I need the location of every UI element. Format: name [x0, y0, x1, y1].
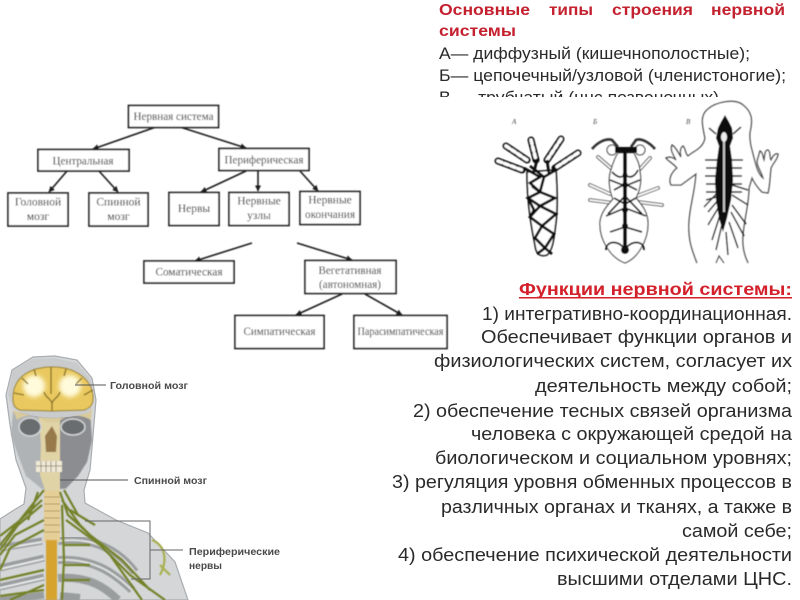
outline	[600, 153, 648, 263]
box: autonomic: (автономная)	[319, 279, 381, 291]
box: nervous system	[128, 106, 218, 128]
body silhouette: head, neck and shoulders	[0, 356, 188, 600]
text: type A: А— диффузный (кишечнополостные);	[439, 44, 750, 63]
diagram: three types of nervous systems	[498, 101, 778, 263]
skull	[11, 408, 92, 490]
heading: functions: Функции нервной системы:	[519, 279, 792, 299]
heading: types of nervous system structure: строения	[612, 2, 693, 19]
function 1 text: физиологических систем, согласует их	[434, 350, 793, 371]
function 3 text: самой себе;	[682, 520, 792, 541]
box: autonomic	[305, 260, 396, 294]
leader frame: peripheral nerves	[85, 521, 183, 579]
box: nerve endings	[300, 192, 360, 224]
function 1 text: деятельность между собой;	[535, 375, 792, 396]
heading: types of nervous system structure: системы	[439, 23, 516, 40]
skull cap	[8, 358, 94, 418]
brain	[13, 367, 93, 411]
box: peripheral	[219, 148, 309, 170]
box: autonomic: Вегетативная	[318, 265, 382, 277]
nerve cord	[623, 152, 627, 252]
box: spinal cord	[89, 193, 148, 226]
diagram A: hydra diffuse nervous system	[498, 118, 578, 256]
text: type B: Б— цепочечный/узловой (членистоногие);	[439, 66, 786, 85]
heading: types of nervous system structure: нервной	[711, 2, 785, 19]
box: nerve endings: Нервные	[308, 194, 352, 206]
box: nervous system: Нервная система	[134, 111, 214, 123]
function 3 text	[392, 471, 792, 541]
label: spinal cord: Спинной мозг	[134, 475, 208, 487]
box: nerves	[169, 192, 219, 226]
outline	[666, 101, 778, 263]
box: nerve ganglia: Нервные	[237, 196, 281, 208]
label: peripheral nerves: Периферические	[189, 546, 280, 558]
heading: types of nervous system structure: Основные	[439, 2, 530, 19]
diagram C: vertebrate tubular nervous system: В	[686, 118, 691, 126]
panel: nervous system structure types text	[439, 3, 784, 97]
function 4 text: 4) обеспечение психической деятельности	[398, 544, 792, 565]
function 3 text: 3) регуляция уровня обменных процессов в	[392, 471, 792, 492]
label: peripheral nerves: нервы	[189, 560, 222, 572]
function 3 text: различных органах и тканях, а также в	[441, 496, 792, 517]
box: brain: Головной	[15, 196, 61, 208]
function 2 text: биологическом и социальном уровнях;	[435, 447, 792, 468]
function 2 text: 2) обеспечение тесных связей организма	[413, 400, 793, 421]
box: spinal cord: Спинной	[96, 196, 141, 208]
box: brain	[8, 193, 68, 226]
heading: types of nervous system structure: типы	[549, 2, 593, 19]
panel: functions of the nervous system	[392, 279, 793, 589]
box: nerve ganglia: узлы	[247, 210, 271, 222]
box: spinal cord: мозг	[107, 211, 130, 223]
leader line: spinal cord	[60, 480, 128, 481]
label: peripheral nerves	[190, 548, 280, 571]
leader line: brain	[75, 384, 106, 386]
function 1 text: Обеспечивает функции органов и	[481, 326, 792, 347]
text: type C, clipped: В — трубчатый (цнс позвоночных)	[439, 88, 719, 107]
box: parasympathetic	[354, 316, 447, 348]
box: peripheral: Периферическая	[224, 154, 304, 166]
arrows between flowchart boxes	[49, 127, 402, 315]
legs and antennae	[590, 157, 662, 205]
heading: types of nervous system structure	[440, 3, 784, 36]
ribs	[0, 540, 135, 600]
box: somatic: Соматическая	[156, 266, 223, 278]
box: nerve ganglia	[229, 192, 289, 226]
box: nerve endings: окончания	[305, 209, 356, 221]
nerves	[704, 127, 748, 255]
diagram C: vertebrate tubular nervous system	[666, 101, 778, 263]
box: nerves: Нервы	[178, 203, 210, 215]
box: parasympathetic: Парасимпатическая	[358, 326, 444, 338]
function 4 text	[398, 544, 792, 589]
peripheral nerves	[0, 490, 170, 600]
box: central	[38, 150, 129, 171]
function 1 text	[434, 303, 793, 396]
diagram B: arthropod chain nervous system	[590, 118, 662, 263]
function 2 text: человека с окружающей средой на	[471, 423, 793, 444]
box: sympathetic	[235, 316, 324, 348]
tentacles	[498, 139, 578, 170]
spinal column	[44, 490, 60, 600]
function 2 text	[413, 400, 793, 468]
flowchart: nervous system classification	[8, 106, 447, 348]
label: brain: Головной мозг	[110, 380, 189, 392]
function 1 text: 1) интегративно-координационная.	[482, 303, 792, 324]
box: sympathetic: Симпатическая	[244, 326, 316, 338]
body	[527, 170, 557, 256]
diagram B: arthropod chain nervous system: Б	[592, 118, 597, 126]
box: brain: мозг	[27, 211, 49, 223]
box: central: Центральная	[52, 156, 114, 168]
diagram A: hydra diffuse nervous system: А	[511, 118, 517, 126]
anatomy illustration: human nervous system	[0, 356, 280, 600]
box: somatic	[144, 261, 234, 283]
function 4 text: высшими отделами ЦНС.	[557, 568, 792, 589]
nerve cord	[715, 115, 733, 232]
